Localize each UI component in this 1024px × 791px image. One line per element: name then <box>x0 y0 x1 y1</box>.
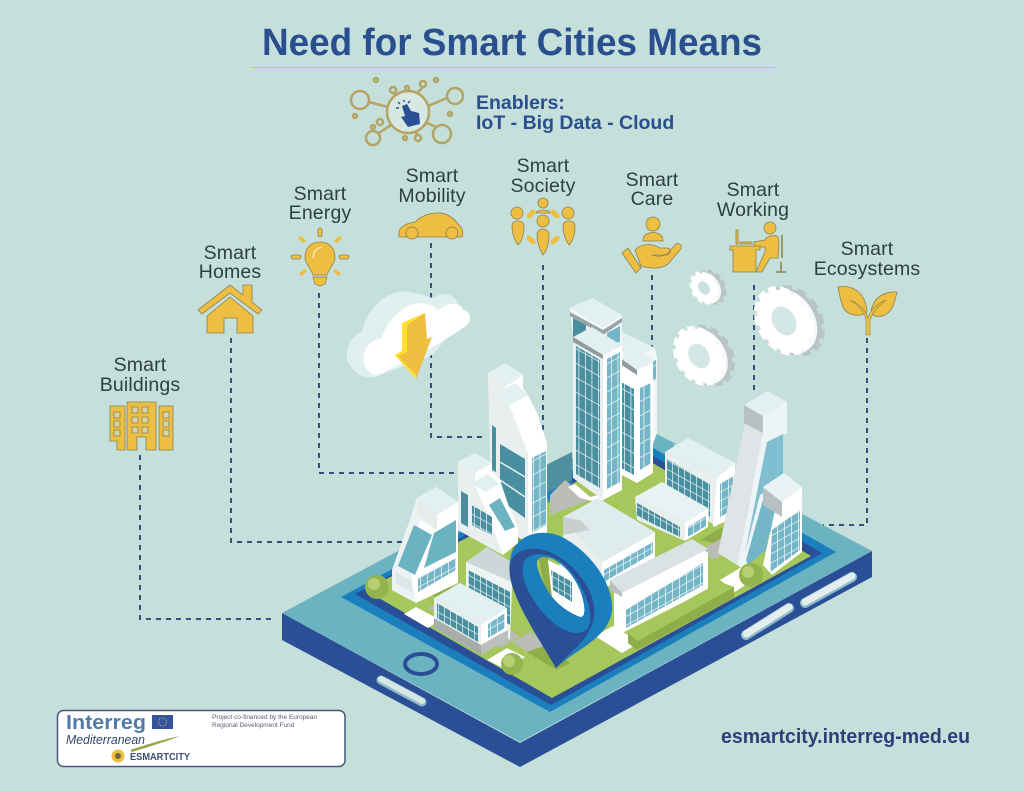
label: smart ecosystems: Ecosystems <box>814 258 920 280</box>
speaker slot <box>381 680 422 702</box>
interreg wordmark: Interreg <box>66 712 146 734</box>
building: right block <box>665 438 735 527</box>
tablet top face <box>282 425 872 742</box>
label: smart working: Smart <box>727 179 780 201</box>
building: front tall tower <box>570 298 622 500</box>
building: front white box <box>434 583 508 655</box>
building: slanted glass tower <box>718 391 787 570</box>
medium gear <box>676 319 732 392</box>
label: smart energy: Smart <box>294 183 347 205</box>
label: smart mobility: Mobility <box>398 185 466 207</box>
mediterranean wordmark: Mediterranean <box>66 733 145 747</box>
label: smart homes: Smart <box>204 242 257 264</box>
swash <box>130 736 180 752</box>
icon: plant <box>838 287 897 335</box>
icon: cloud with download arrow <box>347 291 470 379</box>
home button <box>405 654 437 674</box>
building: central <box>540 498 655 625</box>
icon: buildings <box>110 402 173 450</box>
icon: gears <box>676 266 822 392</box>
ground: roads and patches <box>395 480 760 670</box>
building: behind pin <box>466 547 513 640</box>
funding note: Project co-financed by the European <box>212 714 318 721</box>
screen <box>341 437 836 712</box>
label: smart homes: Homes <box>199 261 261 283</box>
label: smart buildings: Buildings <box>100 374 180 396</box>
building: right stepped block <box>763 473 802 575</box>
icon: people <box>511 198 575 255</box>
label: smart society: Society <box>510 175 576 197</box>
enablers text: IoT - Big Data - Cloud <box>476 112 674 134</box>
label: smart ecosystems: Smart <box>841 238 894 260</box>
esmartcity badge <box>112 750 124 762</box>
building: left glass <box>392 487 458 603</box>
logo panel <box>58 710 345 766</box>
large gear <box>757 279 822 362</box>
title: Need for Smart Cities Means <box>262 22 762 64</box>
icon: enablers network <box>351 78 463 145</box>
label: smart energy: Energy <box>289 202 351 224</box>
icon: person working <box>730 222 786 272</box>
trees <box>365 563 763 675</box>
label: smart care: Smart <box>626 169 679 191</box>
building: front long with green hedge <box>610 539 734 650</box>
connector lines <box>140 243 867 619</box>
label: smart care: Care <box>631 188 673 210</box>
funding note: Regional Development Fund <box>212 722 295 729</box>
label: smart mobility: Smart <box>406 165 459 187</box>
website url: esmartcity.interreg-med.eu <box>721 726 970 748</box>
label: smart society: Smart <box>517 155 570 177</box>
esmartcity wordmark: ESMARTCITY <box>130 752 190 763</box>
small gear <box>691 266 725 308</box>
icon: caring hand <box>622 217 681 273</box>
enablers text: Enablers: <box>476 92 565 114</box>
building: tall stepped tower <box>488 363 547 543</box>
icon: light bulb <box>291 228 349 286</box>
tablet <box>282 425 872 767</box>
side buttons <box>746 577 852 635</box>
icon: car <box>399 213 463 239</box>
building: low block <box>635 482 708 541</box>
view through pin hole <box>538 555 590 622</box>
building: back twin tower <box>620 332 657 483</box>
label: smart working: Working <box>717 199 789 221</box>
label: smart buildings: Smart <box>114 354 167 376</box>
icon: home <box>198 285 262 333</box>
icon: map pin <box>510 533 612 668</box>
eu flag <box>152 715 173 729</box>
tablet side <box>282 551 872 767</box>
building: small stepped <box>458 453 518 555</box>
